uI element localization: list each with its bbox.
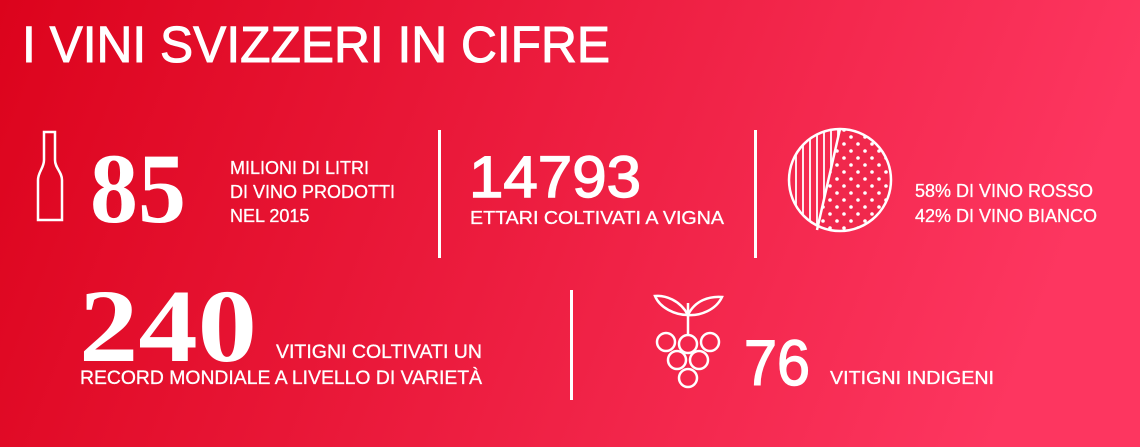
stat: 76: 76 bbox=[744, 327, 810, 399]
text: 240 label: RECORD MONDIALE A LIVELLO DI VARIETÀ bbox=[80, 368, 482, 389]
text: indigenous: VITIGNI INDIGENI bbox=[830, 368, 994, 388]
stat: 85: 85 bbox=[90, 133, 186, 244]
icon: wine bottle bbox=[38, 132, 62, 220]
stat: 240: 240 bbox=[79, 269, 257, 384]
text: 85 label: MILIONI DI LITRI bbox=[230, 158, 369, 178]
title: I VINI SVIZZERI IN CIFRE bbox=[22, 16, 610, 73]
text: pie legend: 42% DI VINO BIANCO bbox=[915, 206, 1097, 226]
text: 85 label: DI VINO PRODOTTI bbox=[230, 182, 395, 202]
pie chart bbox=[788, 128, 892, 232]
text: 240 label bbox=[80, 342, 482, 389]
text: 240 label: VITIGNI COLTIVATI UN bbox=[276, 342, 482, 363]
text: pie legend: 58% DI VINO ROSSO bbox=[915, 181, 1093, 201]
text: 85 label: NEL 2015 bbox=[230, 206, 309, 226]
text: pie legend bbox=[915, 181, 1097, 226]
stat: 14793: 14793 bbox=[469, 145, 641, 210]
text: hectares: ETTARI COLTIVATI A VIGNA bbox=[470, 208, 724, 228]
text: 85 label bbox=[230, 158, 395, 226]
icon: grapes bbox=[655, 296, 722, 387]
